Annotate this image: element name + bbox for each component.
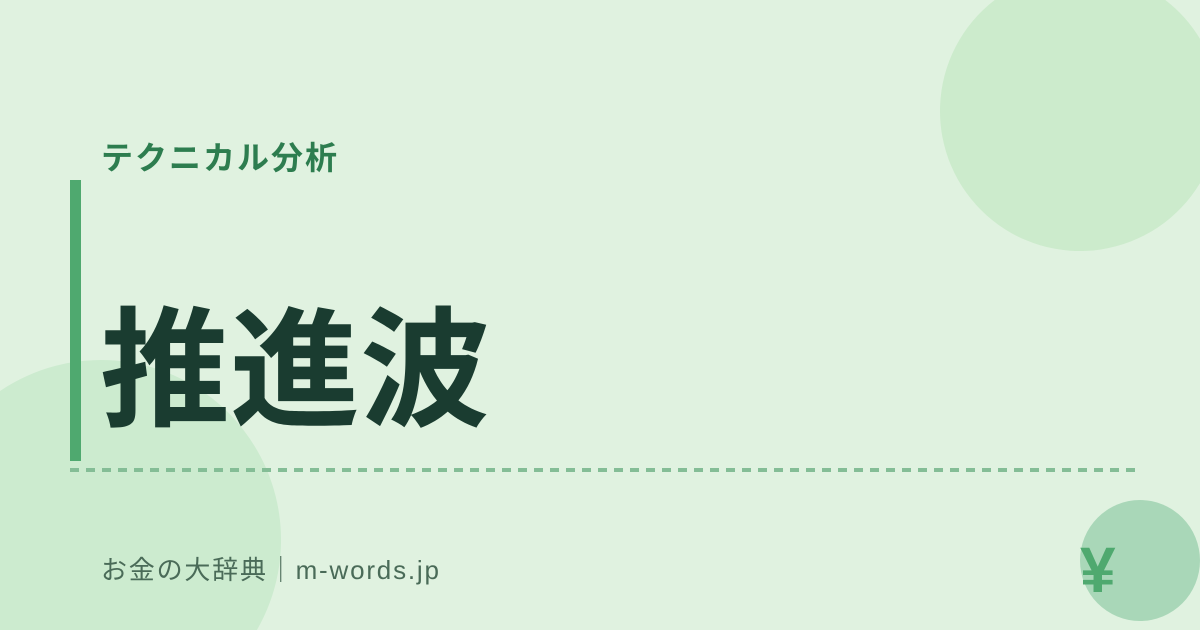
decorative circle: top right [940, 0, 1200, 251]
decorative circle: bottom left [0, 360, 281, 630]
decorative circle: bottom right [1080, 500, 1200, 621]
site name: お金の大辞典｜m-words.jp [101, 555, 441, 585]
icon: yen symbol: ¥ [1080, 534, 1116, 606]
title: 推進波 [100, 298, 490, 444]
dashed divider [70, 468, 1135, 472]
accent bar [70, 180, 81, 461]
category label: テクニカル分析 [101, 140, 339, 176]
